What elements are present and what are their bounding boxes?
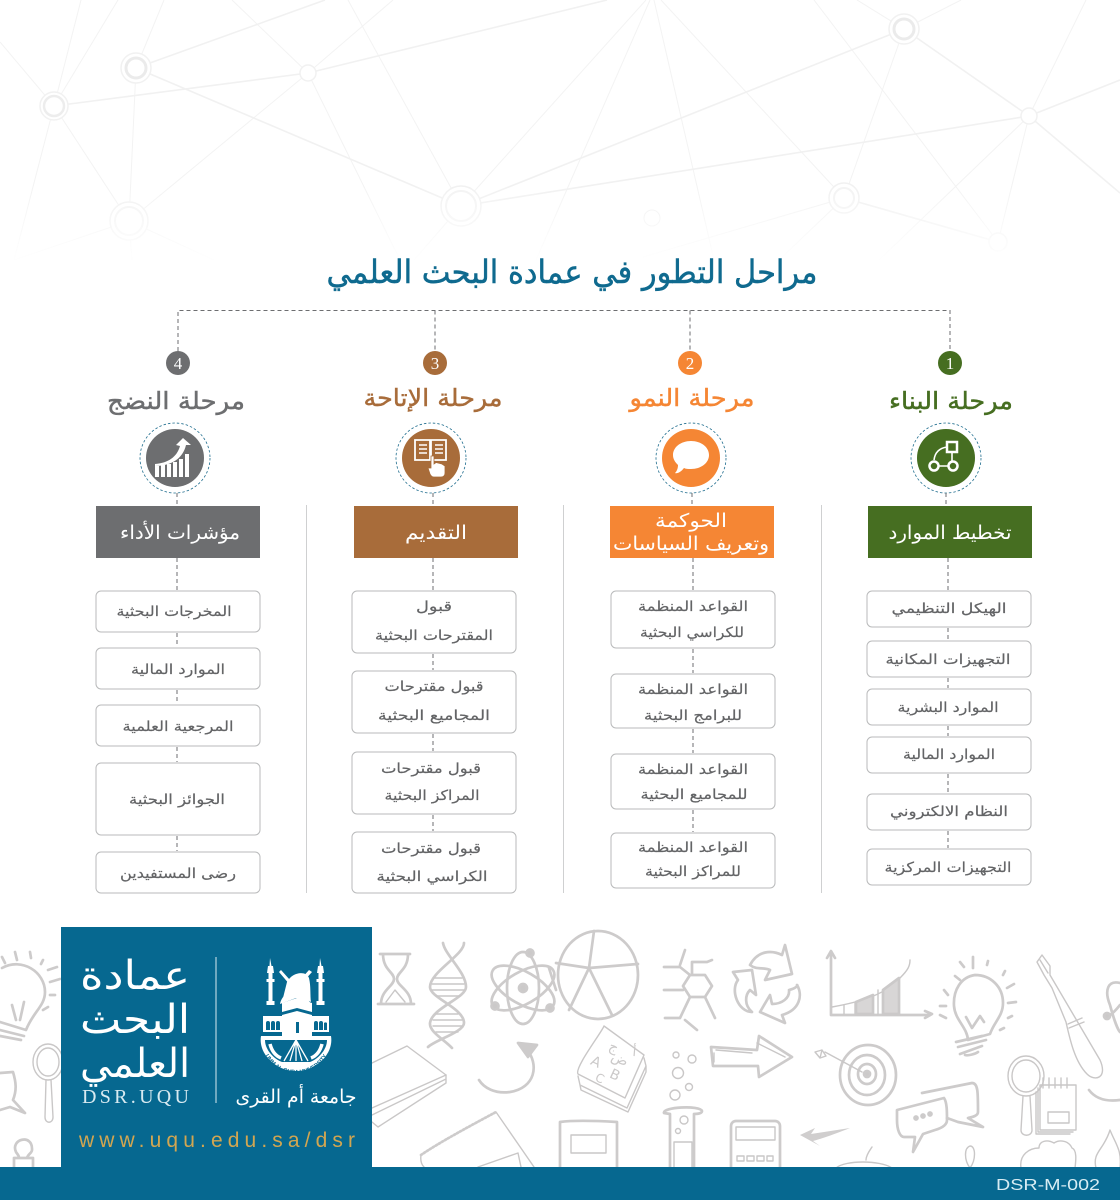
item list: stage 1: الهيكل التنظيمي	[892, 601, 1006, 617]
item list: stage 2: للمجاميع البحثية	[640, 787, 748, 803]
vertical divider	[215, 957, 217, 1103]
icon: alphabet book: ج	[606, 1038, 622, 1057]
item list: stage 4: المخرجات البحثية	[116, 604, 232, 620]
icon: alphabet book: A	[588, 1053, 604, 1072]
item list: stage 2: القواعد المنظمة	[638, 762, 748, 778]
item list: stage 2: للبرامج البحثية	[644, 708, 742, 724]
icon: notebook	[421, 1112, 534, 1167]
deanship name: العلمي	[80, 1041, 190, 1087]
item list: stage 1: النظام الالكتروني	[890, 804, 1008, 820]
item list: stage 1: التجهيزات المركزية	[884, 860, 1012, 876]
dashed connector tree	[178, 310, 950, 351]
icon: block arrow	[711, 1036, 792, 1077]
step number 2: 2	[686, 354, 694, 373]
icon: light bulb left	[0, 952, 60, 1040]
icon: magnifier right	[1008, 1056, 1044, 1135]
header: application	[354, 506, 518, 558]
icon: target with arrow	[815, 1045, 896, 1105]
icon: curve right edge	[1089, 1090, 1120, 1101]
icon: cloud	[1021, 1141, 1076, 1168]
header: governance: وتعريف السياسات	[613, 533, 769, 555]
item list: stage 1: الموارد البشرية	[898, 700, 998, 716]
header: resource planning: تخطيط الموارد	[888, 522, 1012, 544]
background network pattern	[0, 0, 1120, 263]
icon: test tube with bubbles	[664, 1052, 702, 1168]
item list: stage 4: الموارد المالية	[131, 662, 225, 678]
icon: fountain pen	[1037, 955, 1103, 1078]
icon: alphabet book	[578, 1026, 646, 1112]
item list: stage 3	[352, 591, 516, 893]
icon: hexagon molecule	[664, 950, 715, 1030]
document code: DSR-M-002	[996, 1177, 1100, 1194]
item list: stage 3: المجاميع البحثية	[378, 708, 490, 724]
item list: stage 3: قبول	[416, 599, 452, 615]
stage heading 1: مرحلة البناء	[889, 387, 1013, 415]
item list: stage 3: قبول مقترحات	[384, 679, 484, 695]
icon: notepad	[1036, 1078, 1076, 1134]
icon: bound book	[560, 1121, 617, 1168]
icon: alphabet book: C	[593, 1070, 606, 1086]
panel: stage 4 maturity	[96, 351, 260, 893]
icon: alphabet book: أ	[632, 1043, 637, 1060]
icon: bulb small bottom	[966, 1146, 974, 1168]
header: resource planning	[868, 506, 1032, 558]
step number 1: 1	[946, 354, 954, 373]
item list: stage 3: الكراسي البحثية	[376, 869, 488, 885]
item list: stage 3: المراكز البحثية	[384, 788, 480, 804]
icon: stacked books	[372, 1046, 446, 1127]
icon: leaf	[1095, 1130, 1120, 1168]
item list: stage 3: المقترحات البحثية	[375, 628, 493, 644]
icon: stamp left	[14, 1140, 33, 1167]
icon: curved arrow	[479, 1043, 537, 1092]
panel: stage 3 access	[352, 351, 518, 893]
item list: stage 4: المرجعية العلمية	[122, 719, 234, 735]
deanship name	[80, 953, 190, 1087]
icon: light bulb right	[940, 957, 1016, 1055]
item list: stage 4: رضى المستفيدين	[120, 866, 236, 882]
panel: stage 1 building	[867, 351, 1032, 885]
step number 4	[166, 351, 190, 375]
icon: pie chart	[549, 931, 638, 1019]
item list: stage 2: القواعد المنظمة	[638, 599, 748, 615]
item list: stage 2: للمراكز البحثية	[645, 864, 741, 880]
header: performance indicators: مؤشرات الأداء	[120, 521, 240, 544]
stage heading 3: مرحلة الإتاحة	[364, 384, 502, 412]
icon: dna helix	[428, 943, 466, 1048]
university emblem: UMM AL-QURA UNIVERSITY	[266, 1054, 326, 1071]
icon: atom	[485, 950, 561, 1024]
deanship name: عمادة	[80, 953, 190, 999]
icon: process nodes	[911, 423, 981, 493]
icon: area graph	[827, 951, 932, 1018]
icon: apple	[836, 1147, 892, 1168]
title: مراحل التطور في عمادة البحث العلمي	[326, 253, 818, 291]
step number 2	[678, 351, 702, 375]
icon: atom right	[1104, 982, 1120, 1032]
item list: stage 1: التجهيزات المكانية	[886, 652, 1010, 668]
deanship name: البحث	[80, 997, 190, 1043]
icon: book and hand	[396, 423, 466, 493]
header: governance	[610, 506, 774, 558]
header: application: التقديم	[405, 522, 467, 544]
item list: stage 4: الجوائز البحثية	[129, 792, 225, 808]
website url: www.uqu.edu.sa/dsr	[78, 1129, 355, 1152]
step number 1	[938, 351, 962, 375]
decorative science doodles	[0, 931, 1120, 1176]
item list: stage 3: قبول مقترحات	[381, 841, 481, 857]
item list: stage 2: القواعد المنظمة	[638, 840, 748, 856]
item list: stage 2: للكراسي البحثية	[640, 625, 744, 641]
icon: chat bubbles	[897, 1083, 983, 1152]
stage heading 2: مرحلة النمو	[628, 384, 754, 412]
university name: جامعة أم القرى	[236, 1084, 356, 1108]
stage heading 4: مرحلة النضج	[107, 387, 245, 415]
icon: speech bubble	[656, 423, 726, 493]
icon: magnifier left	[33, 1044, 63, 1122]
icon: recycle arrows	[733, 945, 800, 1023]
panel: deanship logo block	[61, 927, 372, 1167]
icon: alphabet book: B	[607, 1066, 622, 1085]
item list: stage 3: قبول مقترحات	[381, 761, 481, 777]
footer bar	[0, 1167, 1120, 1200]
step number 3: 3	[431, 354, 439, 373]
icon: hourglass	[378, 954, 414, 1004]
item list: stage 4	[96, 591, 260, 893]
icon: alphabet book: ض	[609, 1049, 631, 1070]
item list: stage 2	[611, 591, 775, 888]
item list: stage 1	[867, 591, 1031, 885]
icon: growth chart	[140, 423, 210, 493]
DSR.UQU label: DSR.UQU	[82, 1086, 190, 1108]
item list: stage 1: الموارد المالية	[903, 747, 995, 763]
step number 3	[423, 351, 447, 375]
header: performance indicators	[96, 506, 260, 558]
header: governance: الحوكمة	[655, 510, 727, 532]
panel: stage 2 growth	[610, 351, 775, 888]
icon: calculator	[731, 1121, 780, 1176]
icon: speech bubble left	[0, 1072, 25, 1113]
column dividers	[306, 505, 822, 893]
item list: stage 2: القواعد المنظمة	[638, 682, 748, 698]
icon: small arrow	[800, 1128, 850, 1146]
step number 4: 4	[174, 354, 183, 373]
university emblem	[260, 958, 332, 1071]
